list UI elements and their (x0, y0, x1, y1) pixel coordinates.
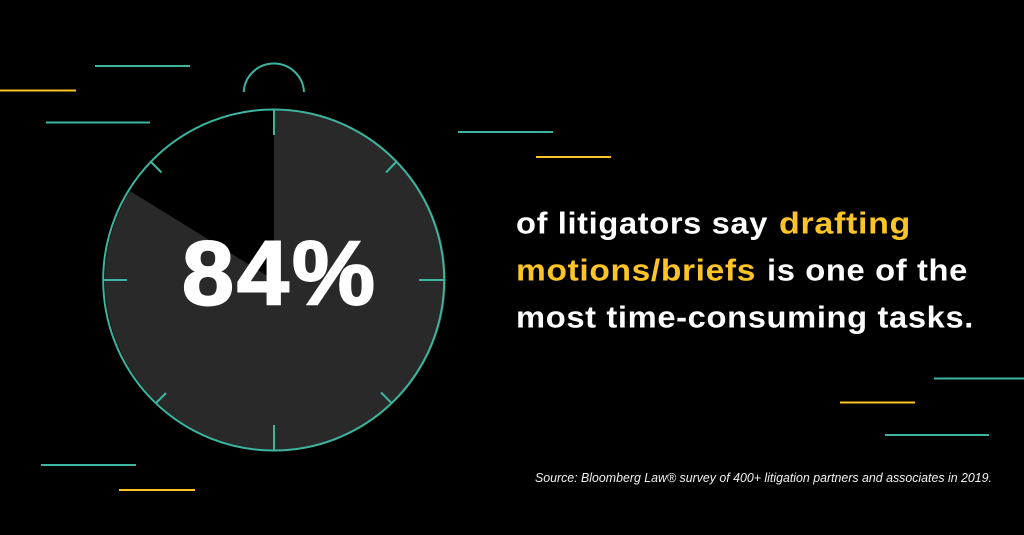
dial tick marks (103, 109, 444, 451)
stopwatch dial outline (103, 110, 444, 450)
main statement text: drafting (779, 206, 911, 240)
main statement text: is one of the (767, 252, 968, 288)
main statement text (516, 206, 974, 334)
big statistic: 84%: 84% (182, 224, 378, 324)
decorative speed lines (0, 66, 1024, 490)
pie chart: 84 percent sector (105, 109, 446, 450)
stopwatch knob (244, 64, 304, 92)
source note: Source: Bloomberg Law® survey of 400+ litigation partners and associates in 2019. (535, 471, 992, 485)
main statement text: of litigators say (516, 206, 768, 240)
main statement text: motions/briefs (516, 252, 756, 288)
stopwatch icon (103, 64, 446, 451)
main statement text: most time-consuming tasks. (516, 300, 974, 334)
